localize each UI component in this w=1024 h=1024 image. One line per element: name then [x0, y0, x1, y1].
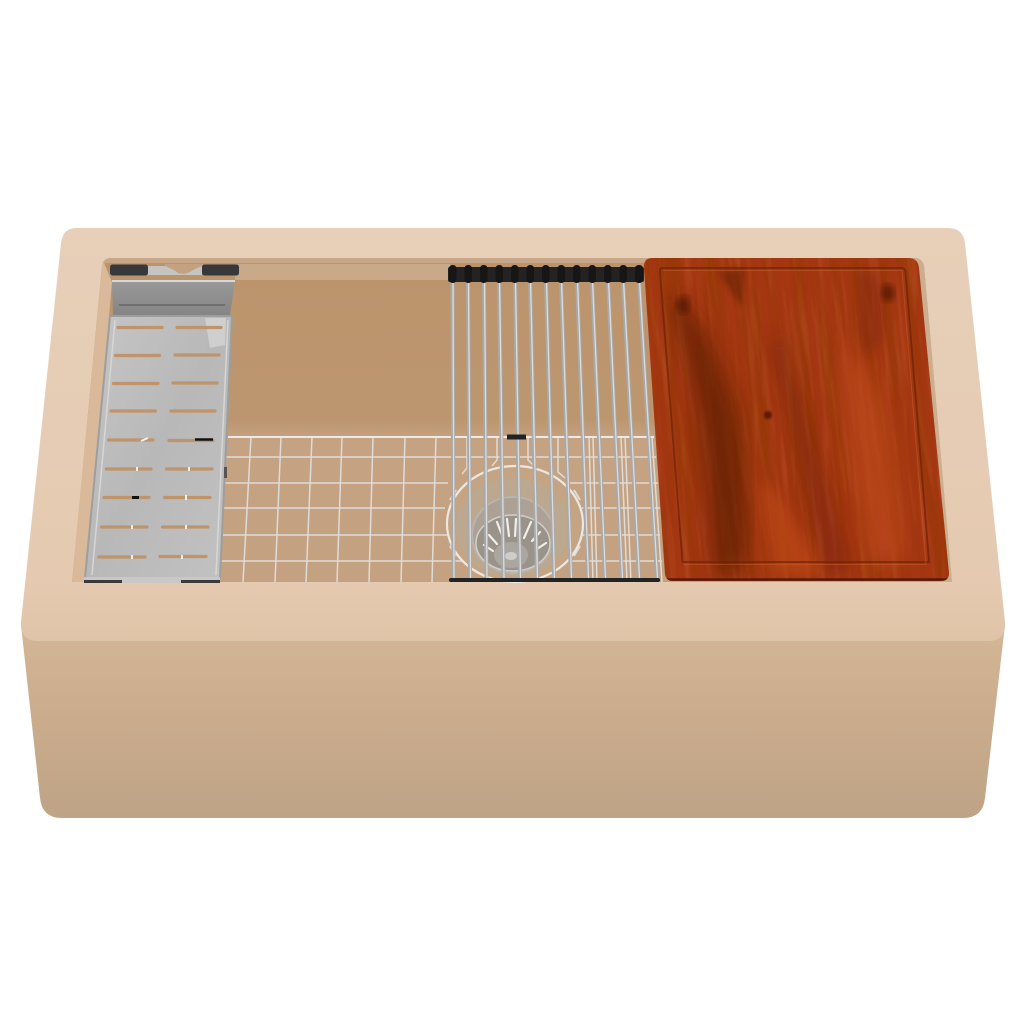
roll-up drying rack	[448, 265, 660, 582]
wooden cutting board	[644, 258, 949, 581]
colander floor	[85, 316, 232, 578]
board bottom edge	[665, 578, 949, 581]
basin right wall	[915, 258, 952, 582]
colander top handle	[110, 266, 202, 275]
board colour patches	[668, 268, 905, 575]
top deck of sink	[21, 228, 1005, 641]
board juice groove	[660, 268, 929, 562]
colander black tabs	[110, 264, 148, 276]
colander slots	[99, 328, 221, 557]
strainer basket	[476, 515, 550, 571]
strainer rim	[472, 497, 554, 573]
black grid clip	[507, 434, 526, 440]
front apron of sink	[21, 625, 1005, 818]
basin back ledge	[235, 264, 450, 280]
rack bottom band	[449, 578, 660, 582]
board knots	[676, 284, 895, 419]
basin opening	[60, 256, 970, 584]
strainer slots	[484, 519, 546, 551]
bottom grid	[219, 437, 662, 582]
board base	[640, 255, 952, 585]
drain ring	[447, 466, 583, 582]
basin left wall	[72, 258, 112, 582]
drain bowl	[456, 478, 570, 578]
rack rods	[452, 280, 657, 578]
colander tray	[84, 264, 239, 583]
colander back wall	[112, 281, 235, 315]
colander front lip	[84, 577, 220, 583]
wires visible through slots	[132, 438, 189, 559]
rack top silicone band	[448, 267, 644, 282]
illustration: workstation farmhouse sink	[20, 228, 1005, 818]
rack rod end caps	[449, 265, 643, 283]
drain with strainer	[447, 466, 583, 582]
board grain	[644, 258, 949, 581]
